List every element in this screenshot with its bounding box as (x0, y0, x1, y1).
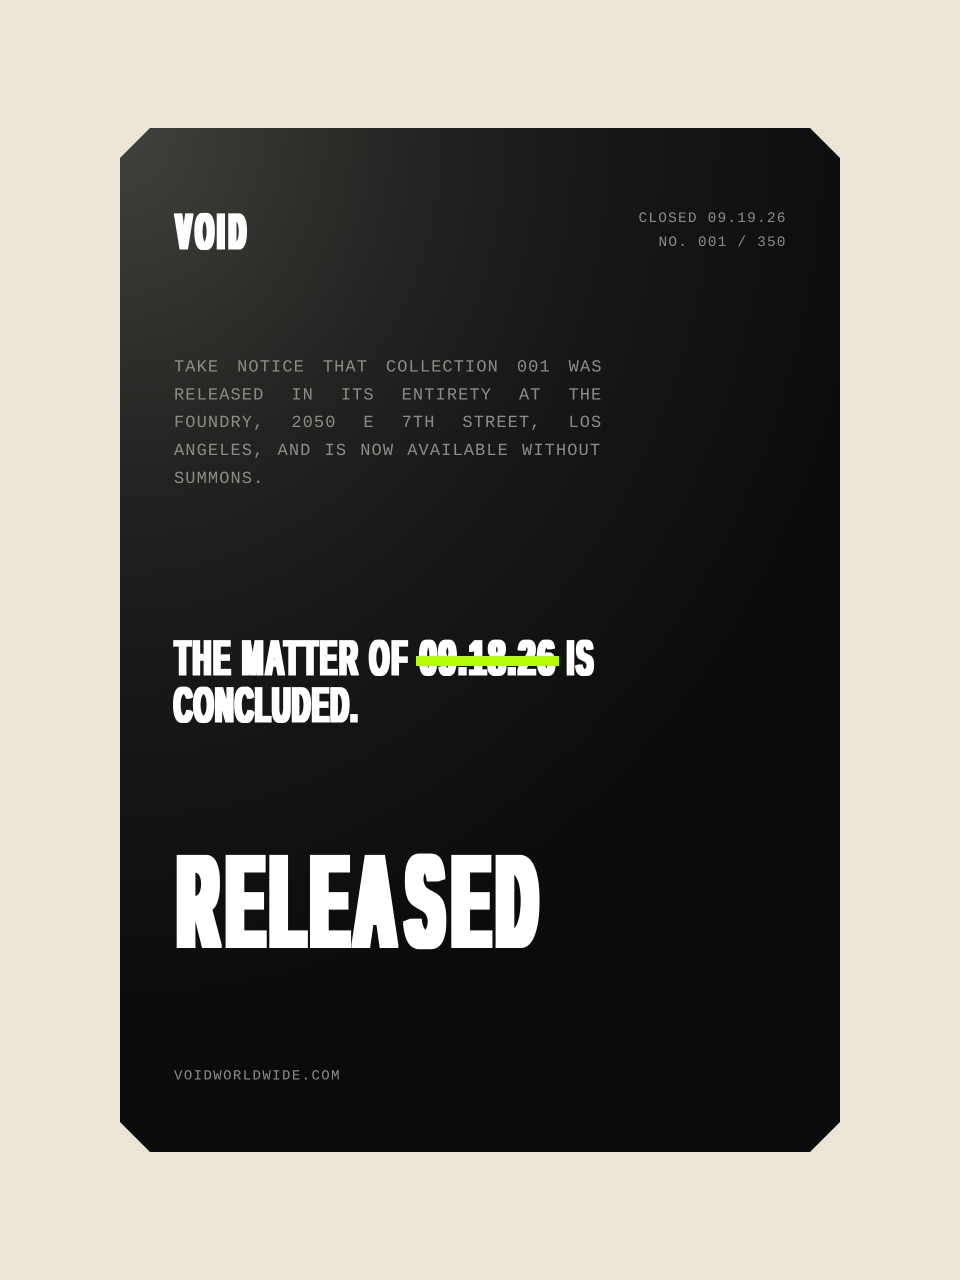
panel: black notched card (120, 128, 840, 1152)
notice paragraph: RELEASED IN ITS ENTIRETY AT THE (174, 386, 602, 406)
lime strikethrough (416, 656, 559, 666)
poster background (120, 128, 840, 1152)
main word: RELEASED: RELEASED (179, 828, 536, 974)
closing date and edition number (638, 211, 786, 251)
statement heading with struck date (174, 630, 593, 733)
notice paragraph: FOUNDRY, 2050 E 7TH STREET, LOS (174, 414, 602, 433)
notice paragraph: ANGELES, AND IS NOW AVAILABLE WITHOUT (174, 442, 601, 461)
statement heading with struck date: THE MATTER OF (175, 630, 407, 686)
notice paragraph: SUMMONS. (174, 470, 264, 489)
footer website: VOIDWORLDWIDE.COM (174, 1068, 340, 1084)
statement heading with struck date: IS (567, 630, 593, 686)
notice paragraph (174, 358, 603, 489)
logo: VOID: VOID (176, 203, 245, 260)
statement heading with struck date: CONCLUDED. (174, 677, 358, 733)
notice paragraph: TAKE NOTICE THAT COLLECTION 001 WAS (174, 358, 603, 378)
closing date and edition number: CLOSED 09.19.26 (638, 211, 786, 227)
statement heading with struck date: 09.18.26 (420, 630, 555, 686)
closing date and edition number: NO. 001 / 350 (658, 235, 786, 251)
